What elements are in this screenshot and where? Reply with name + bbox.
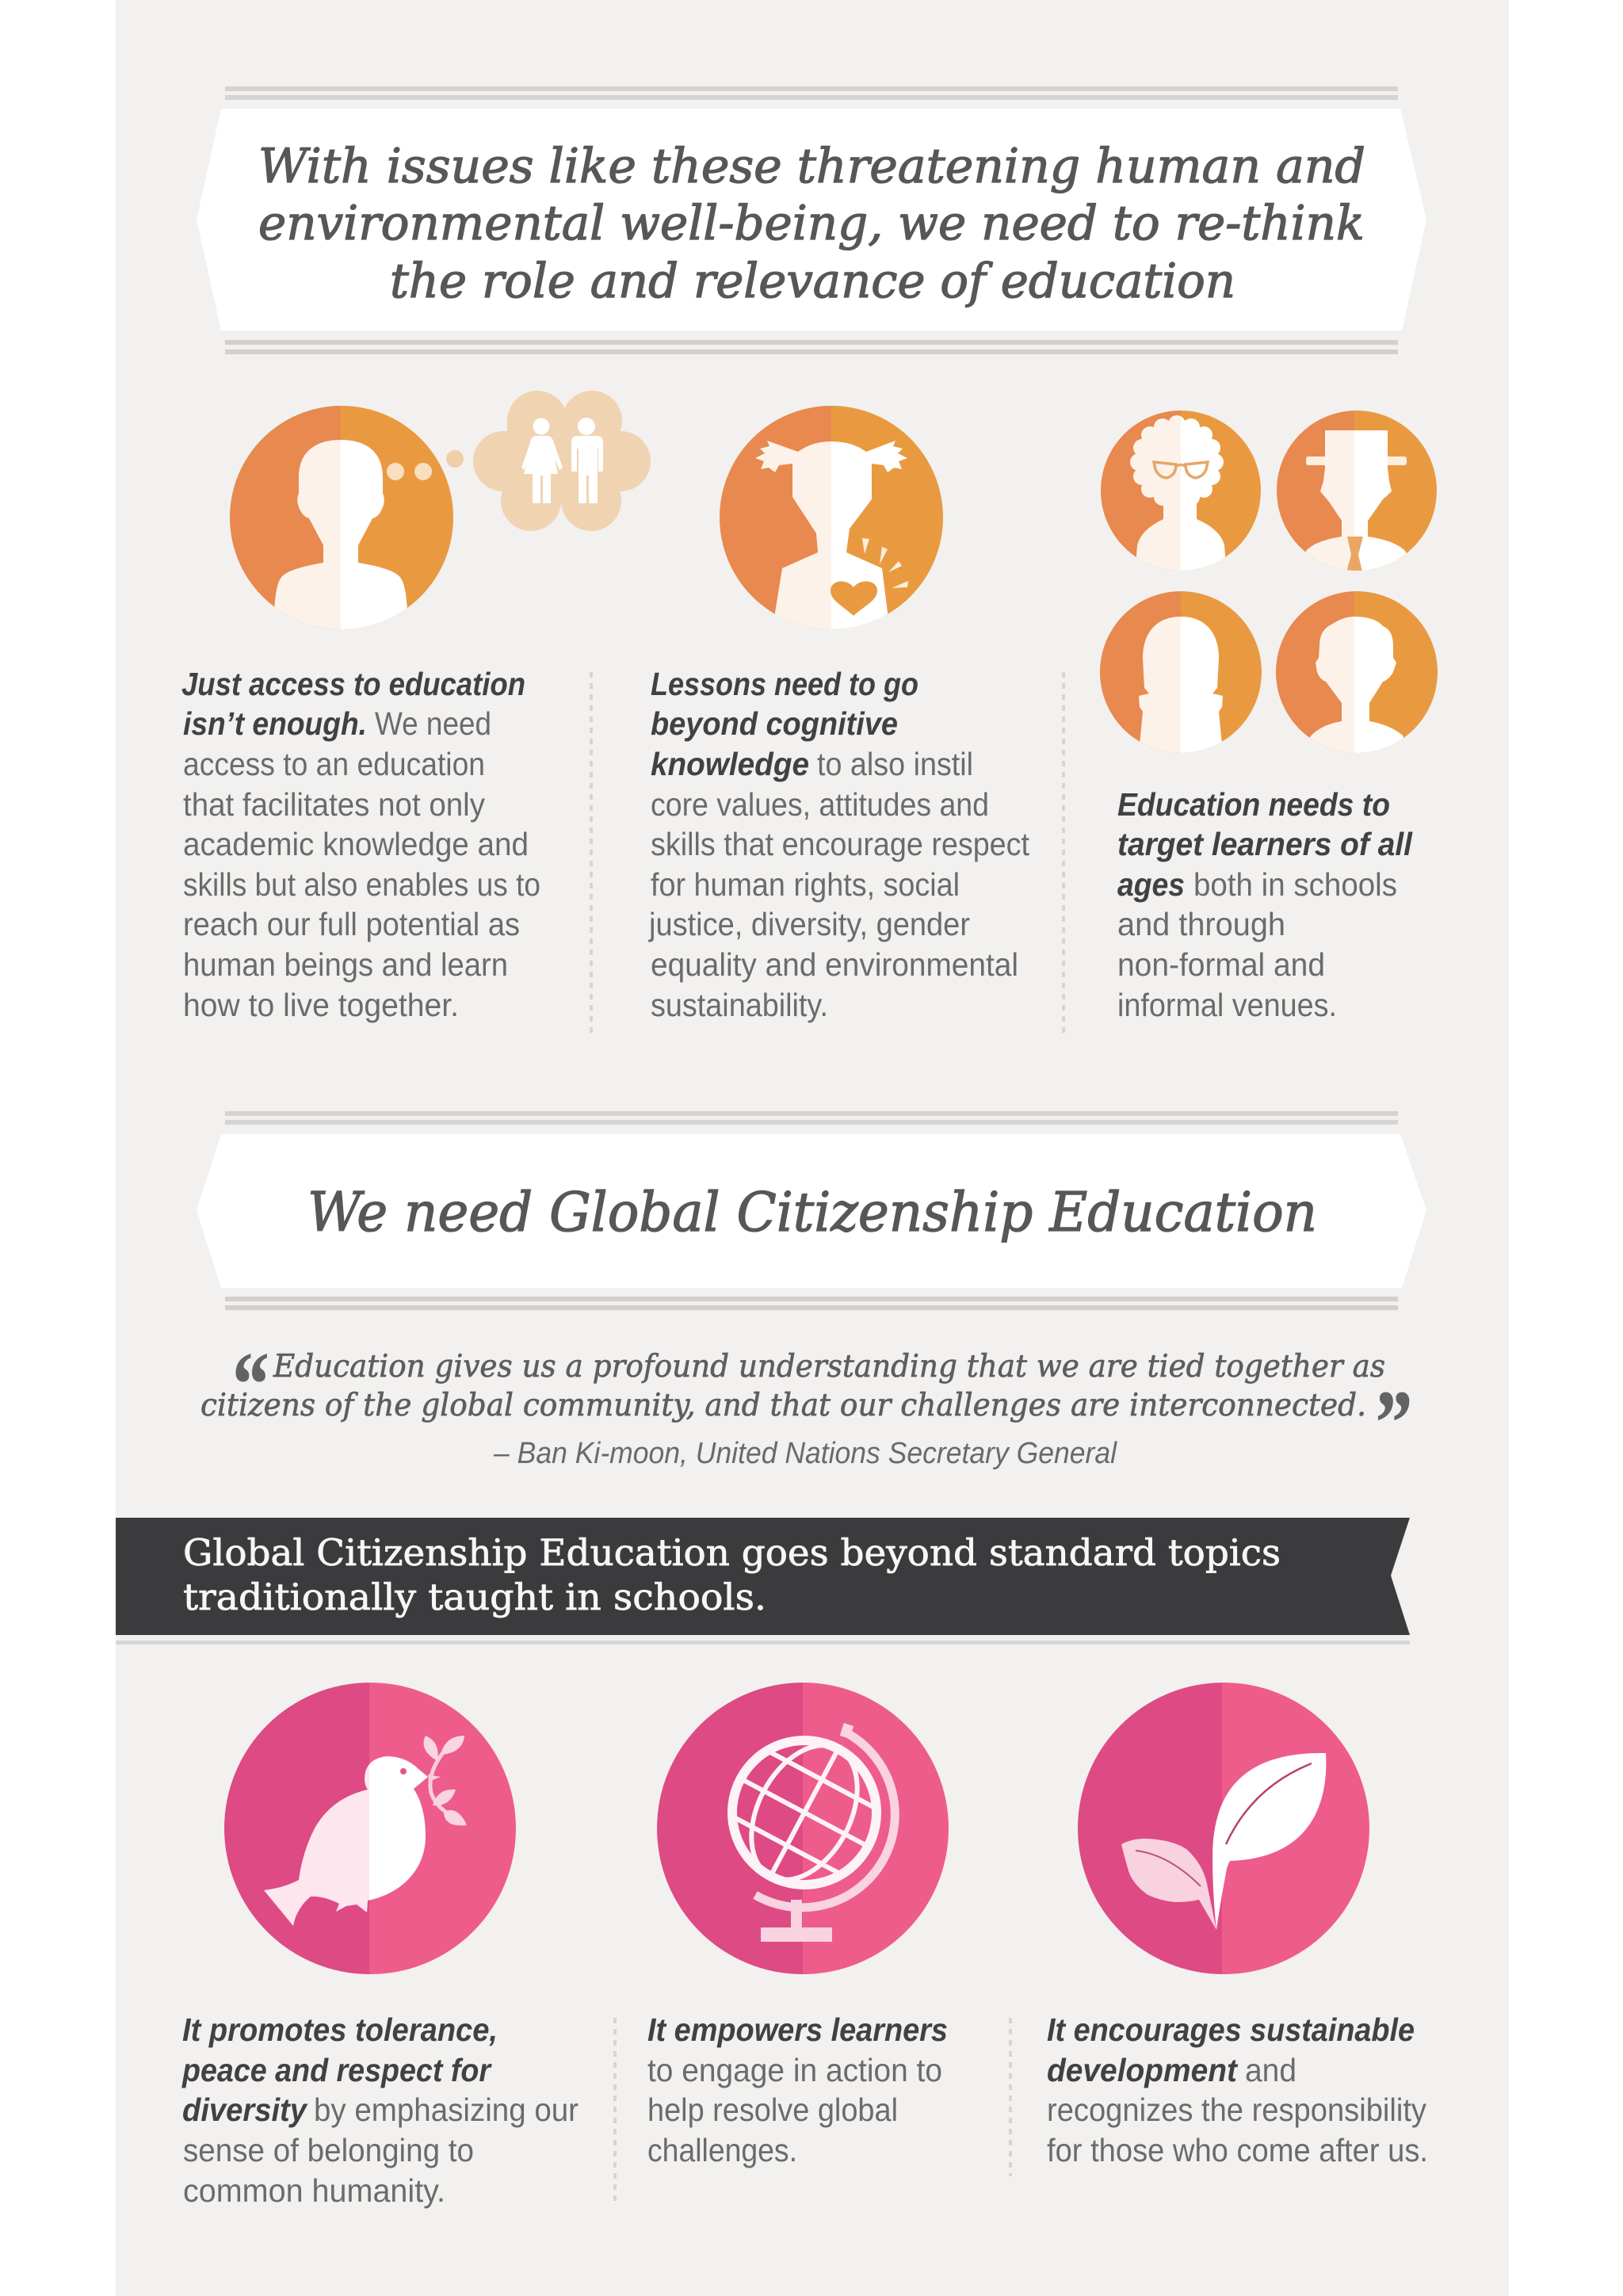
quote: Ban Ki-moon bbox=[200, 1332, 1411, 1475]
ribbon: beyond standard topics bbox=[116, 1518, 1410, 1645]
heading banner: we need global citizenship education: We need Global Citizenship Education bbox=[307, 1182, 1317, 1244]
text block: access to education: access to an education bbox=[183, 746, 485, 782]
ribbon: beyond standard topics: Global Citizenship Education goes beyond standard topics bbox=[183, 1531, 1281, 1574]
icon: woman with long hair bbox=[1100, 591, 1262, 761]
icon: globe on stand bbox=[657, 1683, 949, 1974]
text block: beyond cognitive knowledge: equality and environmental bbox=[651, 946, 1018, 983]
text block: tolerance, peace and respect: common humanity. bbox=[183, 2172, 445, 2209]
text block: access to education: that facilitates not only bbox=[183, 786, 485, 823]
text block: access to education: human beings and learn bbox=[183, 946, 508, 983]
icon: dove with olive branch bbox=[224, 1683, 516, 1974]
quote: Ban Ki-moon: “ bbox=[228, 1332, 268, 1436]
quote: Ban Ki-moon: citizens of the global community, and that our challenges are interconnected. bbox=[200, 1388, 1366, 1423]
icon: man with hat and tie bbox=[1277, 411, 1437, 579]
text block: tolerance, peace and respect: by emphasizing our bbox=[314, 2092, 579, 2128]
text block: empowers learners: help resolve global bbox=[647, 2092, 898, 2128]
text block: beyond cognitive knowledge: for human rights, social bbox=[651, 866, 960, 903]
text block: beyond cognitive knowledge: sustainability. bbox=[651, 987, 828, 1023]
text block: tolerance, peace and respect: sense of belonging to bbox=[183, 2132, 474, 2168]
text block: empowers learners: to engage in action to bbox=[647, 2052, 942, 2088]
text block: access to education: reach our full potential as bbox=[183, 906, 520, 942]
text block: beyond cognitive knowledge: beyond cognitive bbox=[651, 705, 898, 742]
text block: learners of all ages: ages bbox=[1117, 866, 1185, 903]
heading banner: re-think education: the role and relevance of education bbox=[390, 254, 1235, 309]
text block: learners of all ages: informal venues. bbox=[1117, 987, 1337, 1023]
text block: tolerance, peace and respect: diversity bbox=[182, 2092, 308, 2128]
text block: learners of all ages bbox=[1117, 786, 1414, 1023]
text block: beyond cognitive knowledge: core values, attitudes and bbox=[651, 786, 989, 823]
text block: sustainable development: It encourages sustainable bbox=[1047, 2011, 1415, 2048]
icon: sprouting leaves bbox=[1078, 1683, 1369, 1974]
text block: access to education: how to live together. bbox=[183, 987, 459, 1023]
text block: learners of all ages: non-formal and bbox=[1117, 946, 1325, 983]
text block: beyond cognitive knowledge: to also instil bbox=[817, 746, 973, 782]
text block: beyond cognitive knowledge: knowledge bbox=[651, 746, 809, 782]
text block: access to education: We need bbox=[375, 705, 491, 742]
text block: access to education: academic knowledge and bbox=[183, 826, 529, 862]
text block: tolerance, peace and respect: It promotes tolerance, bbox=[182, 2011, 498, 2048]
text block: sustainable development: for those who come after us. bbox=[1047, 2132, 1428, 2168]
heading banner: re-think education bbox=[197, 86, 1426, 354]
text block: beyond cognitive knowledge bbox=[648, 666, 1030, 1023]
text block: learners of all ages: target learners of all bbox=[1117, 826, 1414, 862]
text block: access to education: Just access to education bbox=[181, 666, 525, 702]
text block: empowers learners bbox=[647, 2011, 948, 2168]
text block: sustainable development bbox=[1047, 2011, 1428, 2168]
text block: learners of all ages: both in schools bbox=[1193, 866, 1397, 903]
icon: person thinking of man and woman bbox=[230, 391, 651, 634]
text block: empowers learners: It empowers learners bbox=[647, 2011, 948, 2048]
icon: boy bbox=[1276, 591, 1438, 769]
icon: girl with pigtails and heart bbox=[720, 406, 943, 634]
text block: tolerance, peace and respect: peace and respect for bbox=[181, 2052, 492, 2088]
quote: Ban Ki-moon: ” bbox=[1371, 1371, 1411, 1475]
text block: access to education: isn’t enough. bbox=[183, 705, 367, 742]
heading banner: re-think education: environmental well-being, we need to re-think bbox=[258, 196, 1365, 251]
text block: beyond cognitive knowledge: Lessons need to go bbox=[651, 666, 918, 702]
text block: sustainable development: development bbox=[1047, 2052, 1239, 2088]
icon: elderly woman with glasses bbox=[1101, 411, 1261, 579]
text block: sustainable development: and bbox=[1245, 2052, 1296, 2088]
text block: beyond cognitive knowledge: justice, diversity, gender bbox=[648, 906, 970, 942]
text block: tolerance, peace and respect bbox=[181, 2011, 579, 2209]
text block: beyond cognitive knowledge: skills that encourage respect bbox=[651, 826, 1030, 862]
heading banner: we need global citizenship education bbox=[197, 1111, 1426, 1310]
quote: Ban Ki-moon: – Ban Ki-moon, United Nations Secretary General bbox=[493, 1437, 1117, 1470]
ribbon: beyond standard topics: traditionally taught in schools. bbox=[183, 1576, 766, 1618]
heading banner: re-think education: With issues like these threatening human and bbox=[258, 139, 1365, 194]
text block: access to education bbox=[181, 666, 540, 1023]
text block: sustainable development: recognizes the responsibility bbox=[1047, 2092, 1426, 2128]
text block: learners of all ages: Education needs to bbox=[1117, 786, 1390, 823]
text block: empowers learners: challenges. bbox=[647, 2132, 797, 2168]
text block: learners of all ages: and through bbox=[1117, 906, 1285, 942]
text block: access to education: skills but also enables us to bbox=[183, 866, 540, 903]
quote: Ban Ki-moon: Education gives us a profound understanding that we are tied together as bbox=[273, 1349, 1385, 1385]
